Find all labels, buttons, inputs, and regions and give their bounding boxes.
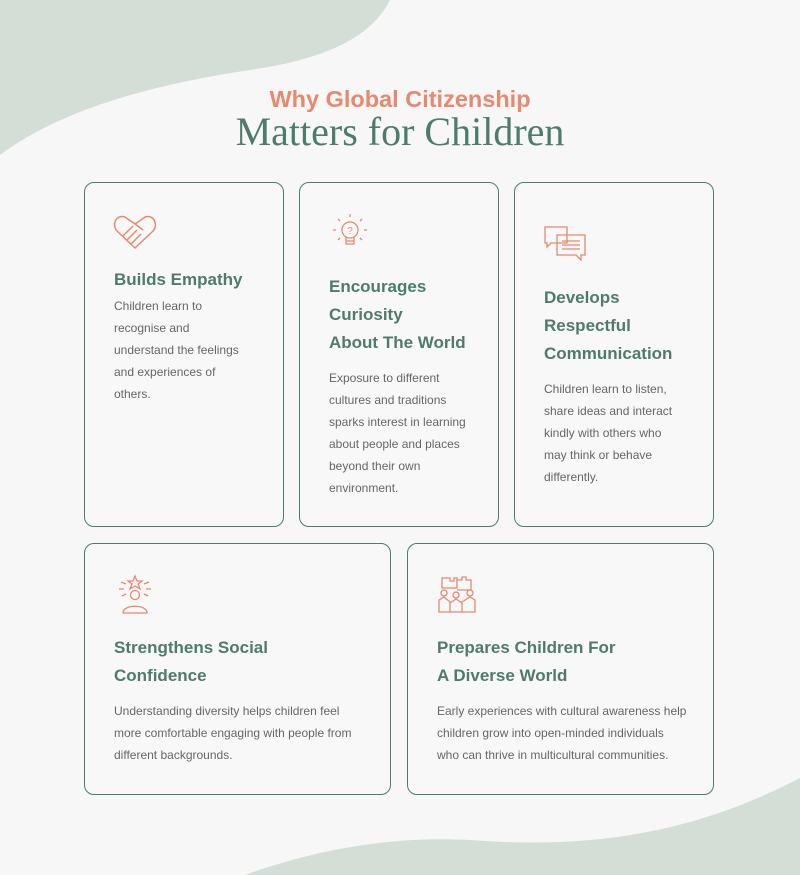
heading [329,277,466,352]
text: beyond their own [329,459,420,473]
heading: Curiosity [329,305,403,324]
text: more comfortable engaging with people from [114,726,351,740]
icon: person star [119,574,151,614]
heading: Respectful [544,316,631,335]
panel: diverse world [407,543,714,795]
panel: builds empathy [84,182,284,527]
panel: curiosity [299,182,499,527]
panel: social confidence [84,543,391,795]
text: may think or behave [544,448,652,462]
text: environment. [329,481,398,495]
heading: Encourages [329,277,426,296]
text [437,704,686,762]
text: cultures and traditions [329,393,446,407]
heading: Prepares Children For [437,638,616,657]
heading: Strengthens Social [114,638,268,657]
heading [114,638,268,685]
text: kindly with others who [544,426,661,440]
text: others. [114,387,151,401]
heading: About The World [329,333,466,352]
icon: lightbulb: ? [347,226,353,237]
title [236,86,564,154]
heading: Builds Empathy [114,270,242,289]
text: Understanding diversity helps children feel [114,704,339,718]
text: differently. [544,470,598,484]
text: different backgrounds. [114,748,233,762]
text: and experiences of [114,365,215,379]
text [114,299,239,401]
text: children grow into open-minded individuals [437,726,664,740]
text [114,704,351,762]
text [544,382,672,484]
text: sparks interest in learning [329,415,466,429]
text: Early experiences with cultural awareness help [437,704,686,718]
icon: puzzle people [438,576,476,613]
icon: speech bubbles [544,226,586,261]
heading: Develops [544,288,620,307]
heading: Confidence [114,666,207,685]
text: understand the feelings [114,343,239,357]
title: Matters for Children [236,109,564,154]
heading: A Diverse World [437,666,567,685]
text: about people and places [329,437,460,451]
heading [437,638,616,685]
text [329,371,466,495]
icon: handshake heart [114,216,156,249]
text: Exposure to different [329,371,440,385]
title: Why Global Citizenship [269,86,531,112]
text: Children learn to listen, [544,382,667,396]
heading [544,288,672,363]
text: share ideas and interact [544,404,672,418]
icon: lightbulb [333,214,367,245]
text: recognise and [114,321,189,335]
panel: communication [514,182,714,527]
text: who can thrive in multicultural communities. [437,748,668,762]
heading: Communication [544,344,672,363]
text: Children learn to [114,299,202,313]
